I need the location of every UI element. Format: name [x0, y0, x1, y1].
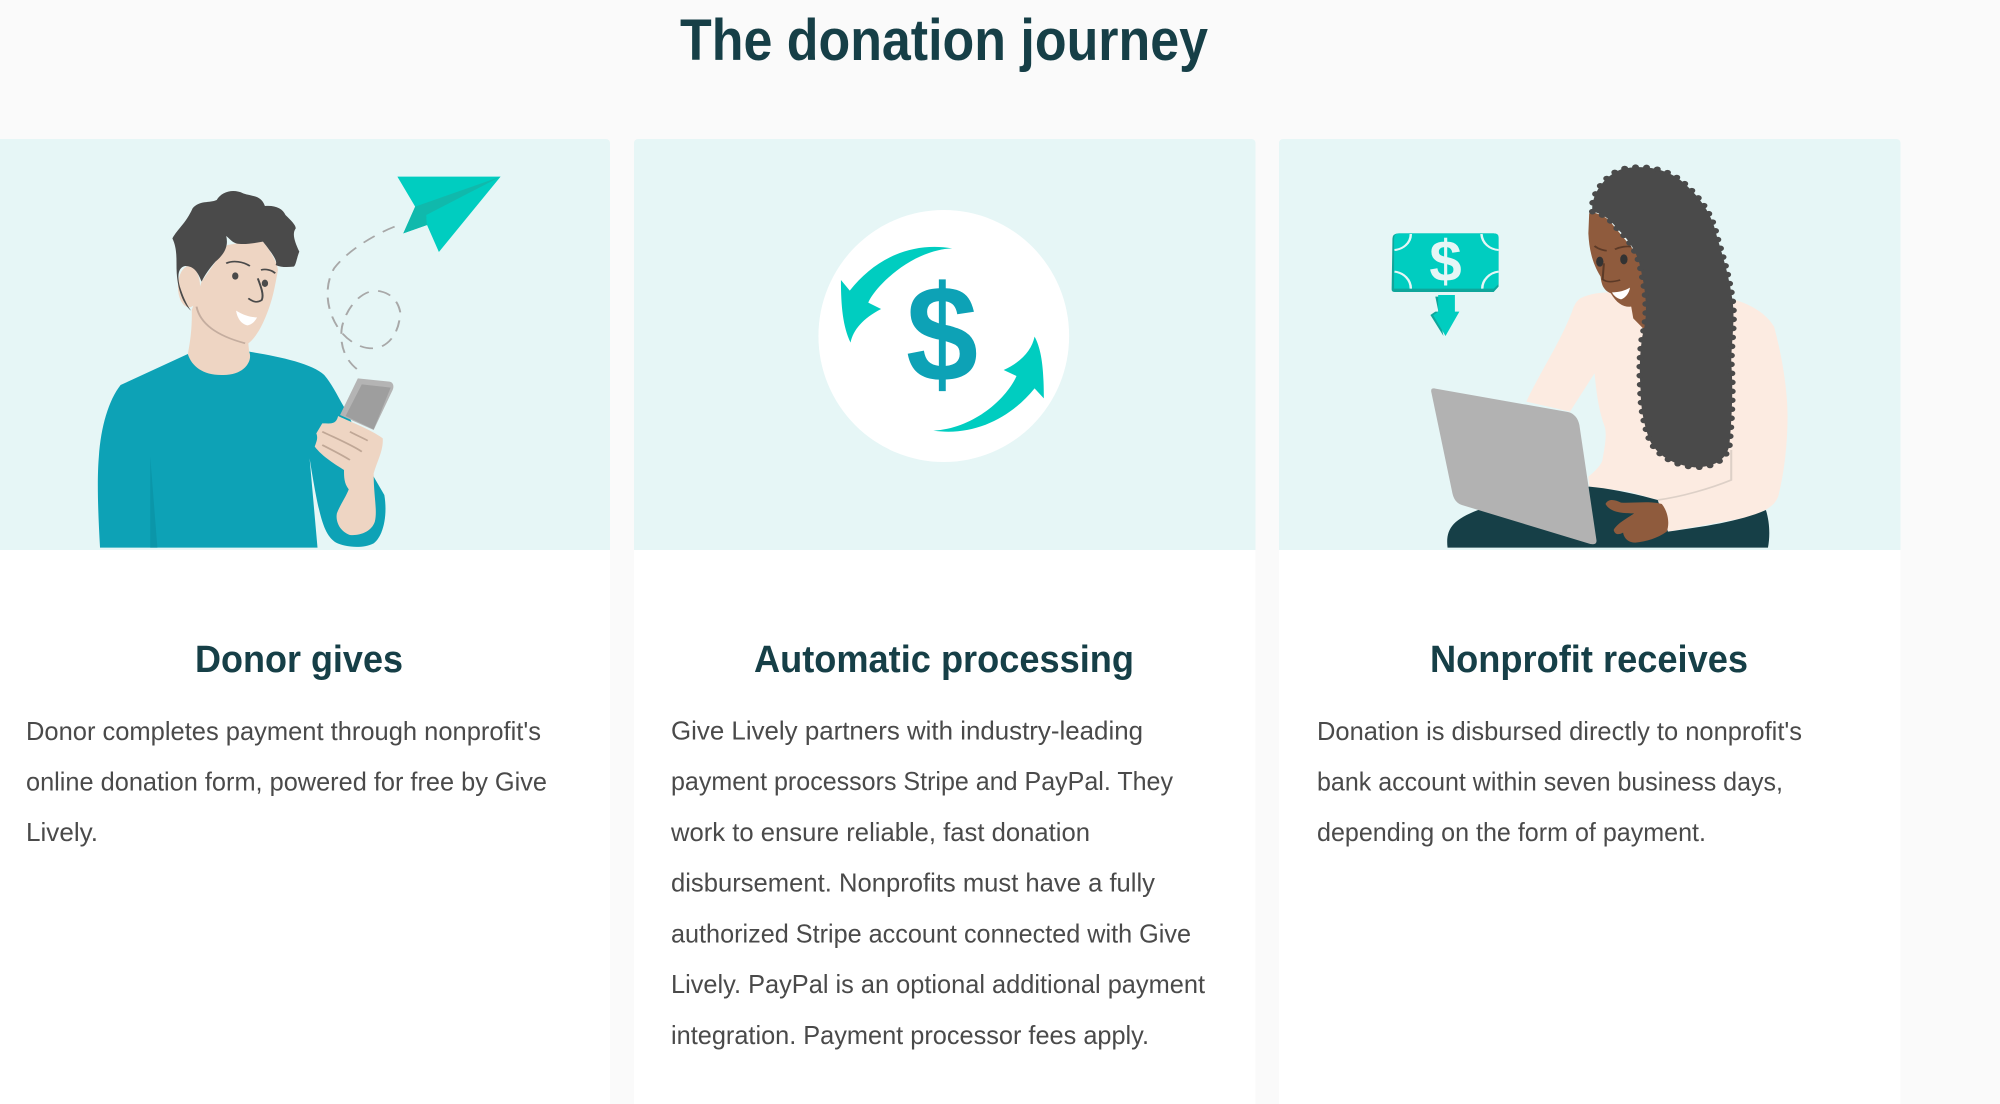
white circle: [818, 210, 1069, 462]
illustration: man with phone and paper plane: [98, 177, 501, 548]
text block: authorized Stripe account connected with Give: [671, 918, 1191, 948]
text block: Give Lively partners with industry-leading: [671, 716, 1143, 746]
heading: Automatic processing: [754, 639, 1134, 681]
text block: Lively.: [26, 817, 98, 847]
illustration background: nonprofit: [1279, 139, 1900, 550]
neck and face: [188, 242, 278, 375]
bill dollar sign: $: [1429, 229, 1462, 294]
trousers: [1447, 487, 1769, 548]
text block: depending on the form of payment.: [1317, 817, 1706, 847]
heading: Donor gives: [195, 639, 403, 681]
sweater: [98, 352, 385, 548]
illustration background: processing: [634, 139, 1256, 550]
hand: [315, 416, 383, 535]
phone: [340, 378, 393, 430]
text block: work to ensure reliable, fast donation: [670, 817, 1090, 847]
icon: dollar sign: $: [906, 258, 978, 411]
face details: [1596, 257, 1603, 267]
sweater: [1526, 292, 1788, 532]
illustration: dollar with circular arrows: [818, 210, 1069, 462]
text block: [670, 716, 1206, 1050]
hand: [1606, 500, 1668, 543]
icon: paper plane: [397, 177, 501, 252]
icon: down arrow: [1430, 295, 1459, 336]
text block: Lively. PayPal is an optional additional payment: [671, 969, 1206, 999]
illustration background: donor: [0, 139, 610, 550]
icon: dollar bill: [1392, 233, 1499, 292]
arrow: bottom right: [933, 337, 1044, 432]
text block: bank account within seven business days,: [1317, 766, 1783, 796]
text block: Donor completes payment through nonprofit's: [26, 716, 541, 746]
heading: Nonprofit receives: [1430, 639, 1748, 681]
face details: [226, 262, 275, 302]
sweater fold: [1658, 450, 1731, 500]
text block: [1317, 716, 1802, 847]
ear: [178, 266, 200, 307]
laptop: [1431, 388, 1597, 544]
panel: automatic processing: [634, 139, 1256, 1104]
arrow: top left: [841, 247, 952, 343]
title: The donation journey: [680, 8, 1208, 73]
panel: donor gives: [0, 139, 610, 1104]
hair: [172, 191, 299, 311]
illustration: woman with laptop and dollar bill: [1392, 167, 1788, 548]
text block: integration. Payment processor fees apply.: [671, 1020, 1149, 1050]
hair: [1592, 167, 1733, 467]
text block: [26, 716, 547, 847]
dashed flight path: [328, 227, 400, 371]
text block: payment processors Stripe and PayPal. They: [671, 766, 1173, 796]
face and neck: [1588, 213, 1648, 330]
text block: disbursement. Nonprofits must have a fully: [671, 868, 1155, 898]
text block: online donation form, powered for free by Give: [26, 767, 547, 797]
panel: nonprofit receives: [1279, 139, 1900, 1104]
text block: Donation is disbursed directly to nonprofit's: [1317, 716, 1802, 746]
